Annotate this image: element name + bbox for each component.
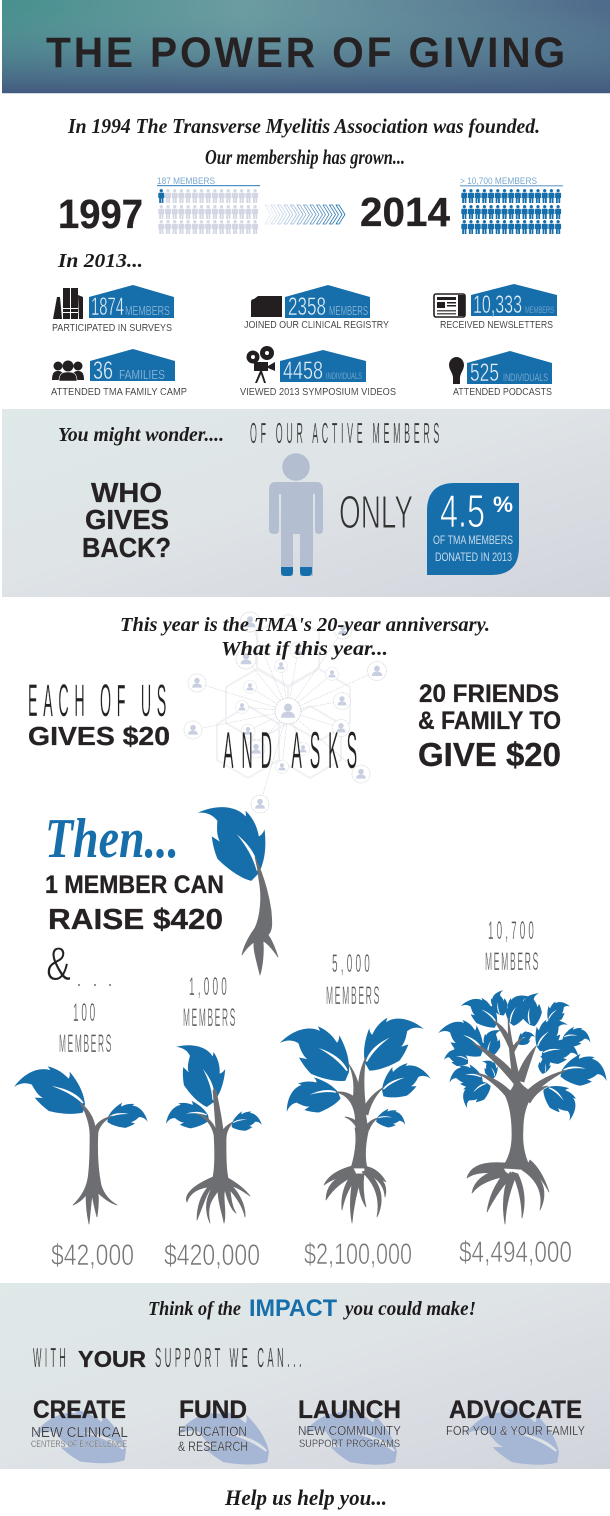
create: CREATE (33, 1396, 126, 1424)
ampersand and dots: & (46, 937, 71, 990)
create: CENTERS OF EXCELLENCE (31, 1439, 127, 1449)
panel: impact (0, 1283, 610, 1470)
tree labels: 10,700 members (485, 917, 540, 976)
tree: 5,000 members (274, 1005, 433, 1223)
stat: family camp: ATTENDED TMA FAMILY CAMP (51, 386, 187, 398)
20 friends and family: & FAMILY TO (418, 707, 561, 735)
who gives back heading: BACK? (82, 532, 171, 563)
panel: impact: SUPPORT WE CAN... (155, 1342, 305, 1373)
stat: surveys: MEMBERS (125, 303, 170, 318)
stat: surveys: PARTICIPATED IN SURVEYS (52, 322, 172, 334)
callout: 4.5% (427, 483, 519, 575)
stat: clinical registry: JOINED OUR CLINICAL REGISTRY (244, 319, 389, 331)
stat: symposium videos: 4458 (283, 357, 323, 385)
20 friends and family (418, 680, 561, 773)
icon: light bulb (449, 357, 464, 384)
In 2013 heading: In 2013... (57, 250, 143, 272)
text: MEMBERS (326, 982, 381, 1010)
advocate: FOR YOU & YOUR FAMILY (446, 1423, 585, 1438)
create: NEW CLINICAL (31, 1424, 128, 1441)
text: MEMBERS (183, 1004, 237, 1032)
callout: 4.5%: 4.5 (440, 485, 485, 537)
gives $20: GIVES $20 (28, 721, 170, 751)
fund: FUND (179, 1396, 247, 1424)
amount: $2,100,000: $2,100,000 (304, 1238, 412, 1271)
only: ONLY (339, 486, 413, 538)
callout: 4.5%: DONATED IN 2013 (435, 550, 512, 564)
1997 pictogram: 187 members: 187 MEMBERS (157, 176, 215, 187)
intro text line 1: In 1994 The Transverse Myelitis Association was founded. (67, 114, 540, 138)
stat: clinical registry: 2358 (288, 293, 326, 321)
with your support we can: WITH (33, 1342, 69, 1373)
launch: LAUNCH (298, 1396, 401, 1424)
icon: film camera (246, 346, 275, 383)
intro text line 2: Our membership has grown... (205, 145, 405, 169)
icon: people (52, 360, 84, 381)
stat: newsletters: MEMBERS (525, 305, 554, 315)
tree: 1,000 members (162, 1031, 263, 1223)
text: MEMBERS (59, 1030, 113, 1058)
title: THE POWER OF GIVING (46, 29, 568, 77)
stat: family camp (51, 349, 187, 398)
2014 pictogram: 10,700 members: > 10,700 MEMBERS (460, 176, 537, 187)
panel: who gives back (2, 409, 610, 597)
stat: newsletters: 10,333 (473, 291, 522, 319)
stat: family camp: FAMILIES (119, 367, 165, 382)
fund: & RESEARCH (178, 1438, 248, 1454)
icon: person (269, 453, 323, 576)
1 member can raise $420 (45, 871, 224, 936)
who gives back heading (82, 477, 171, 563)
with your support we can (33, 1342, 305, 1373)
advocate: ADVOCATE (449, 1396, 582, 1424)
then heading: Then... (45, 808, 179, 870)
header banner (2, 0, 610, 94)
stat: symposium videos (240, 346, 396, 398)
create (31, 1396, 128, 1449)
stat: podcasts (449, 351, 552, 398)
stat: podcasts: ATTENDED PODCASTS (453, 386, 552, 398)
network diagram (184, 612, 386, 813)
amount: $4,494,000: $4,494,000 (459, 1236, 572, 1269)
chevron arrow (265, 205, 345, 224)
text: EACH OF US (28, 675, 172, 726)
amount: $42,000: $42,000 (51, 1239, 134, 1272)
icon: books (53, 288, 83, 319)
tree labels: 100 members (59, 999, 113, 1058)
2014 pictogram: 10,700 members (460, 176, 563, 234)
anniversary text line 2: What if this year... (221, 638, 388, 660)
tree labels: 100 members: 100 (73, 999, 98, 1027)
think of the impact (148, 1295, 476, 1322)
launch (298, 1396, 401, 1450)
with your support we can: YOUR (78, 1346, 146, 1372)
advocate (446, 1396, 585, 1438)
ampersand and dots (46, 937, 111, 990)
stat: clinical registry (244, 285, 389, 331)
who gives back heading: GIVES (85, 504, 169, 535)
tree labels: 5,000 members (326, 950, 381, 1010)
20 friends and family: 20 FRIENDS (419, 680, 559, 708)
you might wonder: You might wonder.... (58, 424, 224, 446)
launch: NEW COMMUNITY (298, 1423, 401, 1438)
year 2014: 2014 (360, 189, 450, 235)
anniversary text line 1: This year is the TMA's 20-year anniversary. (120, 614, 490, 636)
stat: surveys (52, 285, 174, 334)
1 member can raise $420: 1 MEMBER CAN (45, 871, 224, 899)
20 friends and family: GIVE $20 (418, 736, 561, 773)
stat: surveys: 1874 (91, 293, 124, 321)
stat: family camp: 36 (93, 357, 113, 385)
think of the impact: you could make! (343, 1298, 476, 1320)
stat: symposium videos: VIEWED 2013 SYMPOSIUM VIDEOS (240, 386, 396, 398)
stat: podcasts: INDIVIDUALS (503, 372, 548, 384)
icon: folder (251, 296, 282, 317)
tree: 10,700 members (434, 988, 610, 1224)
watermark leaves (30, 1402, 565, 1470)
tree labels: 1,000 members (183, 973, 237, 1032)
think of the impact: Think of the (148, 1298, 241, 1320)
callout: 4.5%: OF TMA MEMBERS (433, 533, 513, 547)
text: 10,700 (488, 917, 537, 945)
tree: 100 members (10, 1060, 150, 1224)
fund: EDUCATION (178, 1423, 247, 1439)
stat: symposium videos: INDIVIDUALS (326, 371, 362, 381)
callout: 4.5%: % (493, 492, 513, 517)
fund (178, 1396, 248, 1454)
who gives back heading: WHO (91, 477, 162, 508)
text: 5,000 (332, 950, 373, 978)
icon: newspaper (434, 294, 465, 317)
think of the impact: IMPACT (249, 1295, 337, 1322)
amount: $420,000: $420,000 (164, 1239, 260, 1272)
1997 pictogram: 187 members (157, 176, 260, 234)
lone sprout (184, 788, 284, 975)
stat: newsletters: RECEIVED NEWSLETTERS (440, 319, 553, 331)
launch: SUPPORT PROGRAMS (299, 1438, 400, 1450)
stat: podcasts: 525 (470, 359, 499, 387)
stat: newsletters (434, 284, 557, 331)
text: 1,000 (189, 973, 230, 1001)
stat: clinical registry: MEMBERS (329, 303, 368, 318)
year 1997: 1997 (58, 191, 143, 237)
closing line: Help us help you... (224, 1485, 387, 1510)
1 member can raise $420: RAISE $420 (48, 904, 223, 936)
